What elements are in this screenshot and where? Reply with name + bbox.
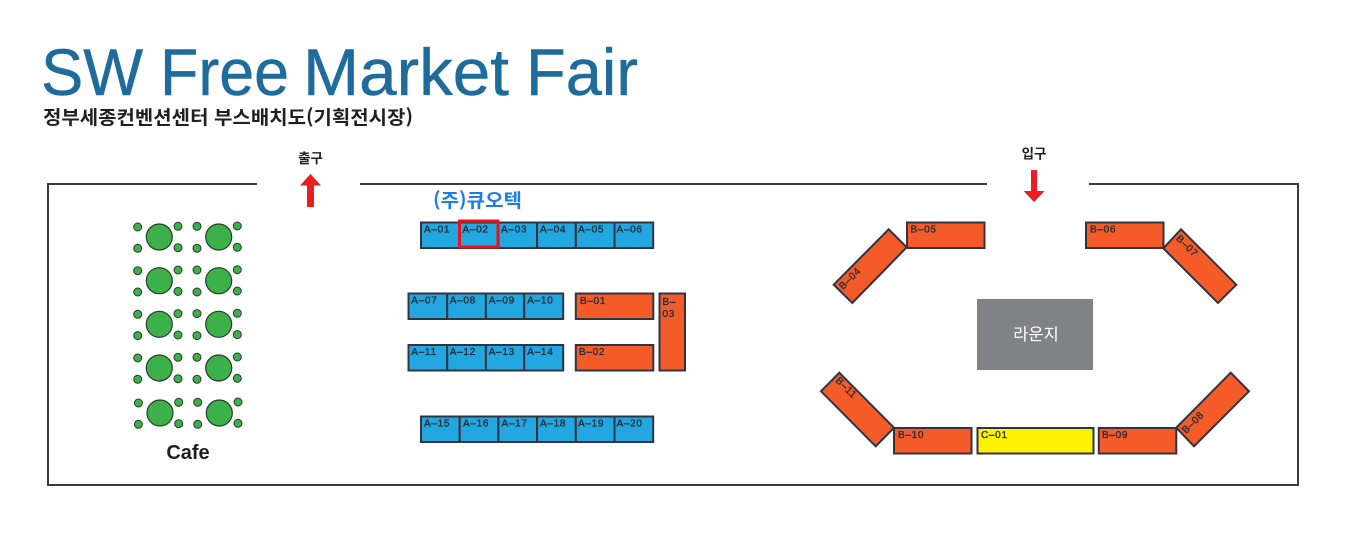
- subtitle: 정부세종컨벤션센터 부스배치도(기획전시장): [43, 103, 413, 130]
- title: Fair: [526, 35, 638, 109]
- booth B-02: B–02: [579, 347, 605, 358]
- booth B-04: B–04: [837, 266, 864, 292]
- booth row: A-01 to A-06: A–06: [616, 224, 643, 236]
- title: Free: [160, 35, 289, 109]
- booth row: A-15 to A-20: A–17: [502, 418, 528, 430]
- booth B-11: [821, 373, 894, 446]
- booth B-04: [834, 229, 907, 303]
- hall outline: [48, 184, 1298, 485]
- booth B-10: [894, 428, 972, 454]
- booth row: A-01 to A-06: A–01: [424, 224, 450, 236]
- booth row: A-01 to A-06: [421, 222, 653, 248]
- company callout: (주)큐오텍: [433, 186, 522, 213]
- booth B-03: 03: [662, 309, 675, 320]
- entrance label: 입구: [1022, 142, 1046, 162]
- booth B-05: B–05: [910, 224, 937, 236]
- cafe seating area: [134, 222, 242, 428]
- booth B-06: [1086, 222, 1164, 248]
- booth row: A-07 to A-10: A–10: [527, 296, 553, 306]
- booth row: A-01 to A-06: A–03: [501, 224, 527, 236]
- booth row: A-15 to A-20: A–15: [424, 418, 450, 430]
- booth B-07: B–07: [1173, 233, 1200, 260]
- booth row: A-11 to A-14: A–14: [527, 347, 553, 358]
- booth B-09: [1099, 428, 1176, 454]
- booth row: A-01 to A-06: A–02: [462, 224, 489, 236]
- booth B-08: [1176, 373, 1249, 446]
- booth row: A-01 to A-06: A–05: [578, 224, 604, 236]
- booth B-06: B–06: [1090, 224, 1116, 236]
- booth B-02: [576, 345, 653, 370]
- booth row: A-11 to A-14: [408, 345, 563, 370]
- booth row: A-07 to A-10: [408, 294, 563, 319]
- exit label: 출구: [298, 147, 323, 167]
- arrow: exit: [300, 174, 321, 207]
- booth B-07: [1163, 229, 1236, 303]
- booth B-11: B–11: [833, 375, 859, 401]
- booth row: A-11 to A-14: A–12: [450, 347, 476, 358]
- booth row: A-07 to A-10: A–07: [411, 296, 437, 306]
- booth row: A-11 to A-14: A–13: [489, 347, 515, 358]
- booth C-01: C–01: [981, 430, 1008, 441]
- cafe label: Cafe: [166, 442, 210, 464]
- title: SW: [41, 35, 144, 109]
- booth row: A-07 to A-10: A–08: [450, 296, 476, 306]
- booth row: A-15 to A-20: A–20: [616, 418, 643, 430]
- booth row: A-11 to A-14: A–11: [411, 347, 437, 358]
- booth row: A-15 to A-20: A–19: [578, 418, 604, 430]
- booth B-05: [907, 222, 984, 248]
- booth B-10: B–10: [898, 430, 924, 441]
- arrow: entrance: [1024, 170, 1044, 202]
- booth B-03: B–: [662, 297, 676, 308]
- booth B-08: B–08: [1180, 410, 1207, 436]
- booth row: A-15 to A-20: A–18: [540, 418, 566, 430]
- selected booth highlight: A-02: [460, 221, 498, 247]
- booth row: A-01 to A-06: A–04: [540, 224, 566, 236]
- booth B-09: B–09: [1102, 430, 1128, 441]
- booth B-01: B–01: [580, 296, 606, 307]
- booth row: A-15 to A-20: [421, 416, 653, 442]
- booth B-03: [660, 294, 685, 370]
- booth row: A-15 to A-20: A–16: [463, 418, 489, 430]
- lounge: 라운지: [1013, 321, 1059, 345]
- booth B-01: [576, 294, 653, 319]
- booth C-01: [978, 428, 1094, 454]
- title: [41, 35, 638, 109]
- booth row: A-07 to A-10: A–09: [489, 296, 515, 306]
- title: Market: [303, 35, 509, 109]
- lounge: [977, 299, 1093, 370]
